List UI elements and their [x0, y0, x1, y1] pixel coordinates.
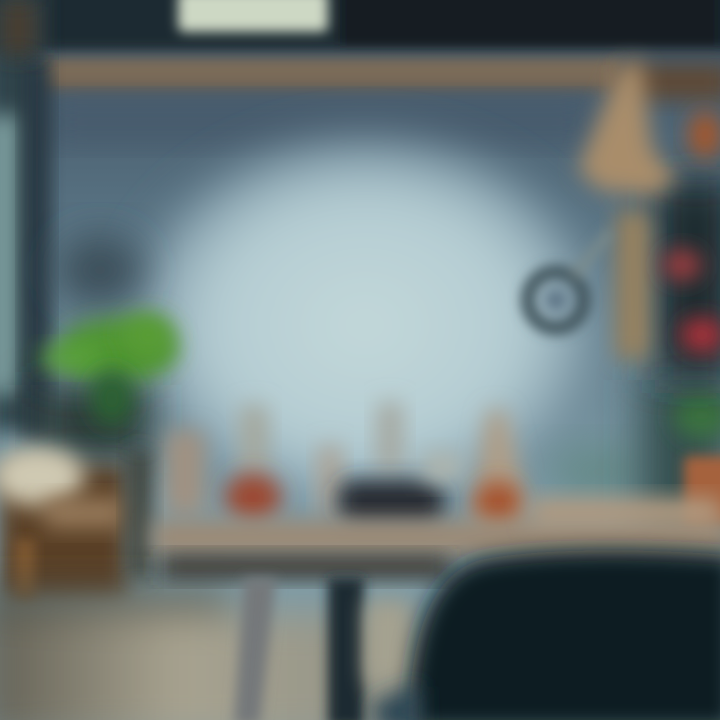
left window and dark column — [0, 0, 48, 440]
ceiling light — [178, 0, 328, 32]
plant — [35, 236, 178, 460]
table legs — [234, 578, 410, 720]
wall shadow under beam — [40, 104, 600, 140]
wall glow — [110, 120, 620, 530]
wall clock wheel — [528, 232, 610, 328]
right shelf and hanging items — [578, 62, 720, 380]
right side pot and wall tint — [550, 380, 720, 530]
table — [152, 498, 720, 578]
floor — [0, 590, 420, 720]
wooden beam — [40, 58, 620, 92]
bottles on table — [165, 402, 522, 530]
dark foreground chair — [370, 550, 720, 720]
left armchair — [0, 446, 152, 600]
ceiling — [0, 0, 720, 50]
